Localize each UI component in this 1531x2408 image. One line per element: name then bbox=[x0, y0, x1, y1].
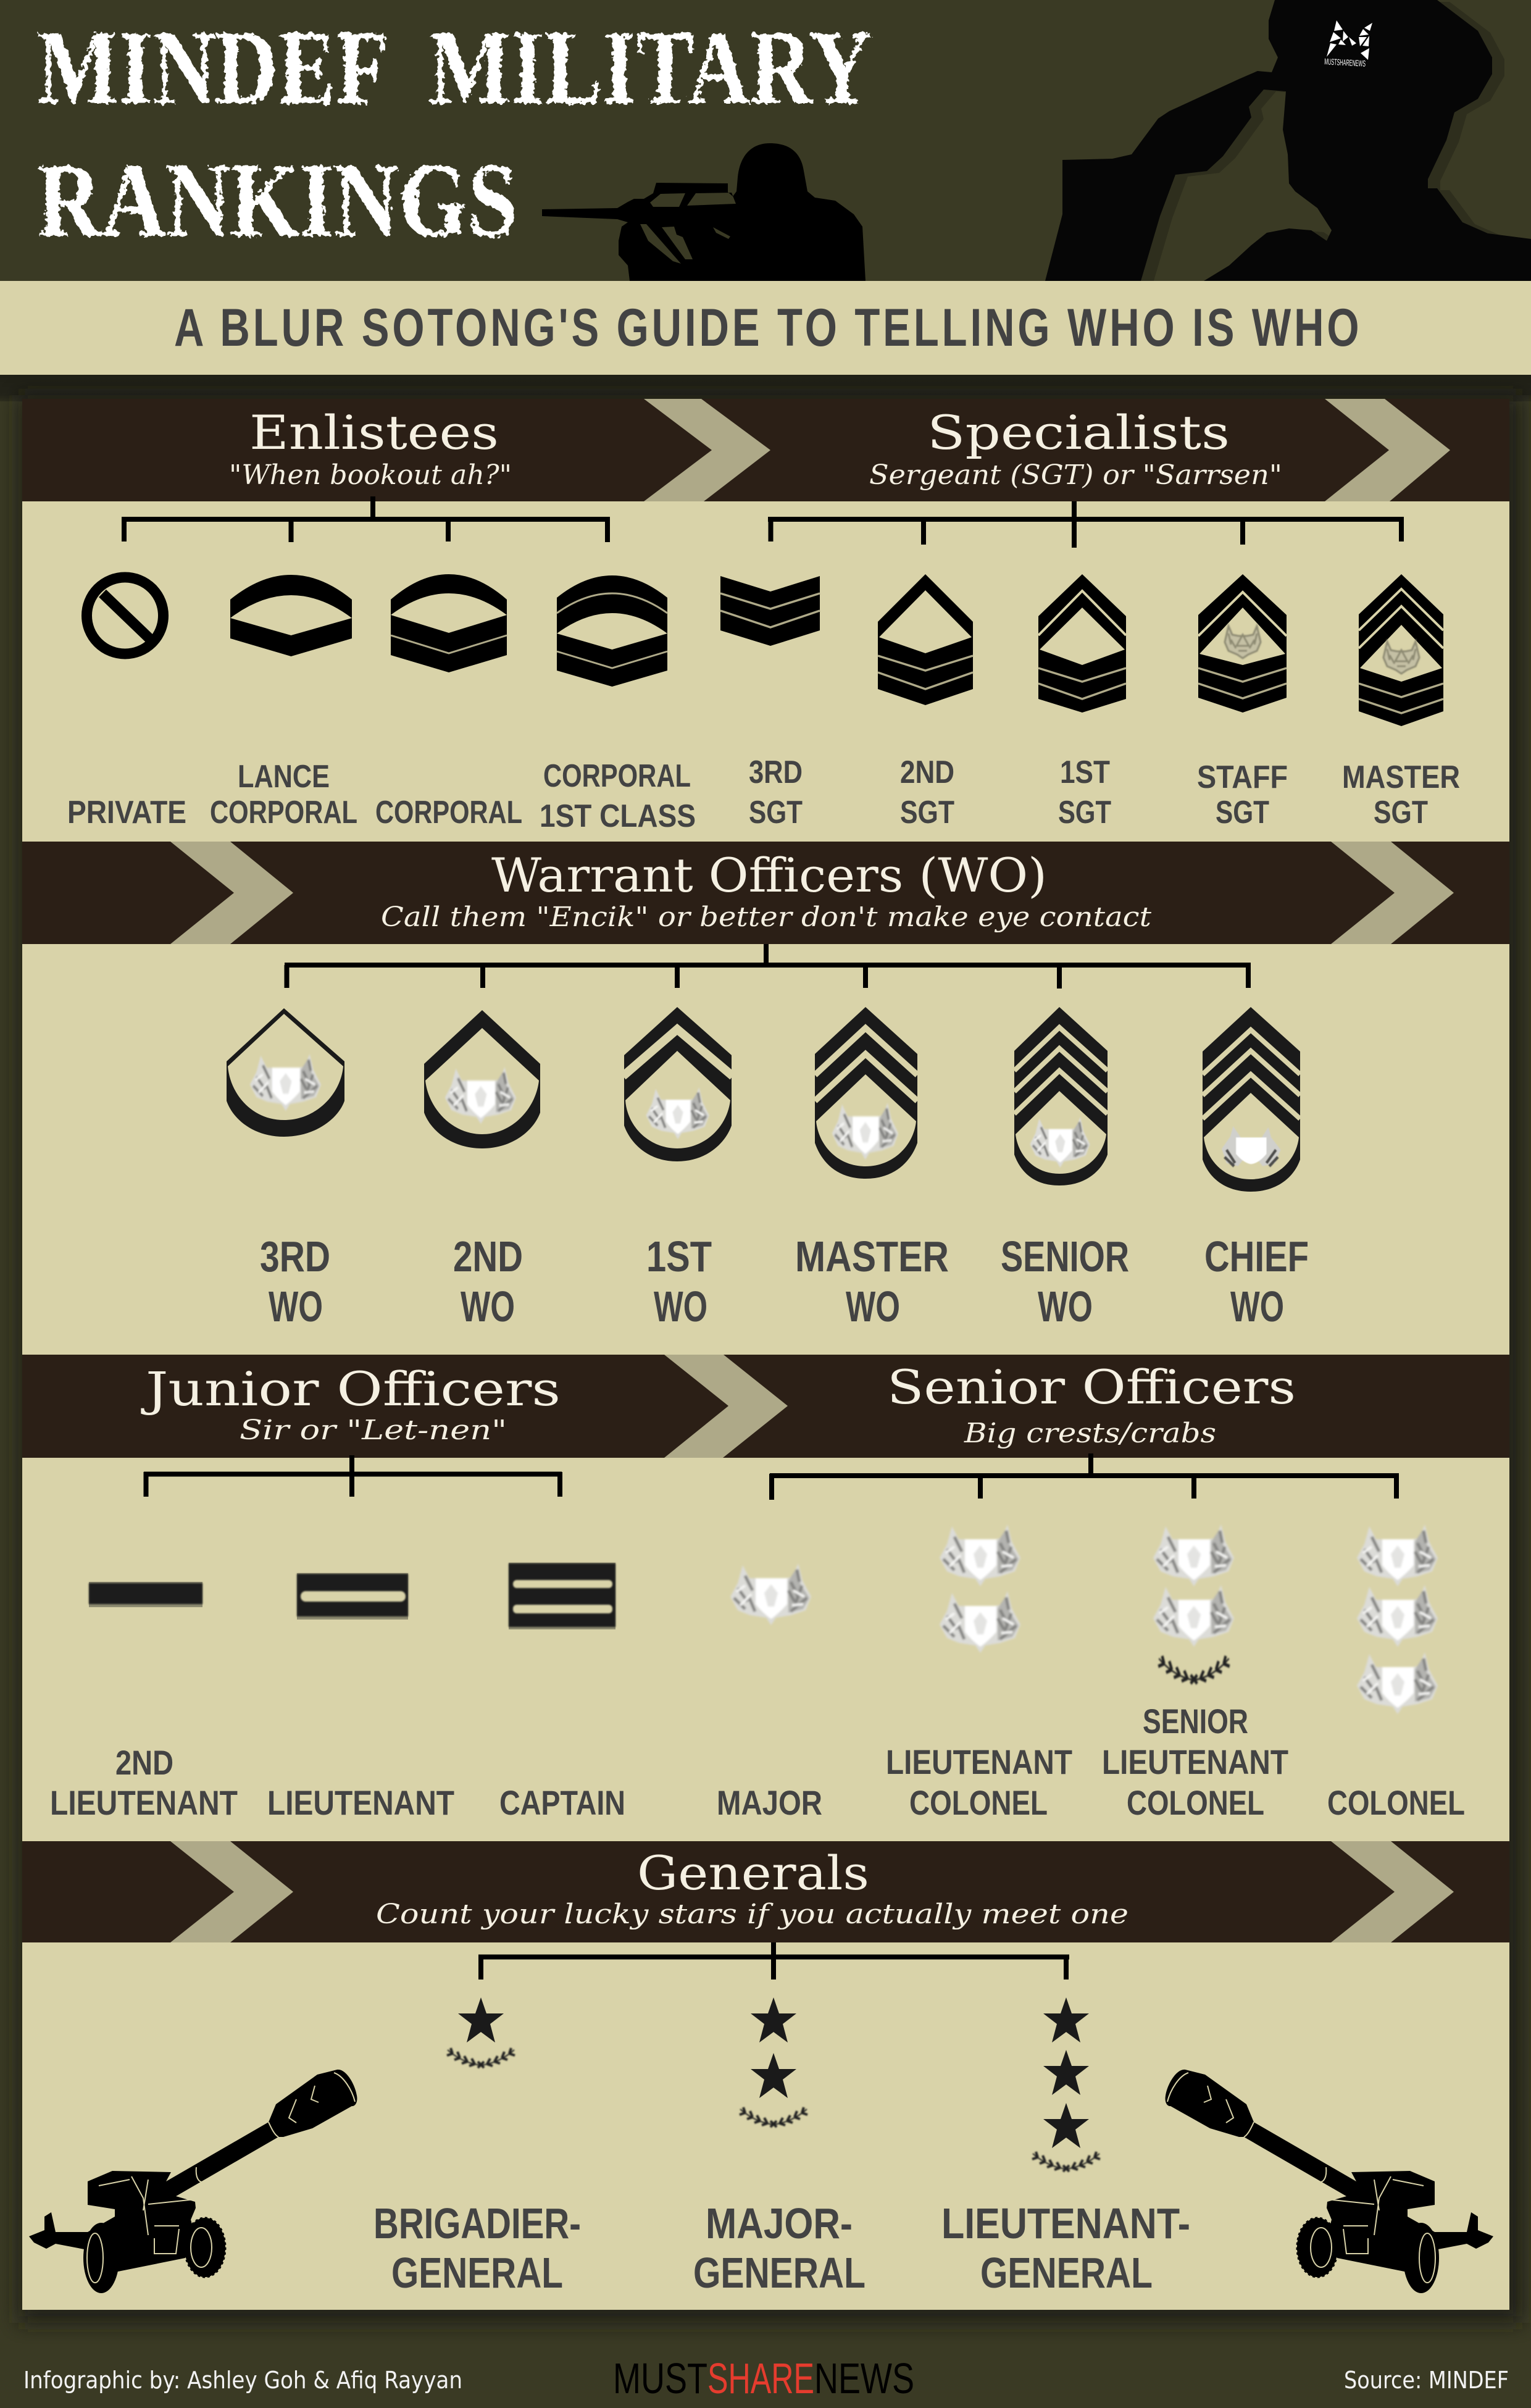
logo: Must Share News: MUST bbox=[613, 2354, 707, 2402]
label: brigadier-general: BRIGADIER- bbox=[373, 2199, 581, 2247]
icon: second lieutenant bar bbox=[89, 1582, 202, 1607]
icon: lieutenant bars bbox=[297, 1573, 408, 1620]
label: staff sgt: STAFF bbox=[1197, 759, 1288, 795]
logo on cap: MUSTSHARENEWS bbox=[1324, 56, 1366, 69]
banner: Junior and Senior Officers: Big crests/crabs bbox=[964, 1418, 1216, 1449]
label: 1st wo: 1ST bbox=[646, 1232, 712, 1281]
label: senior wo: SENIOR bbox=[1001, 1232, 1129, 1281]
label: 2nd sgt: 2ND bbox=[900, 755, 954, 790]
panel: Enlistees ranks bbox=[67, 496, 696, 834]
icon: senior lieutenant colonel crests and laurel bbox=[1153, 1524, 1234, 1684]
icon: brigadier-general star and laurel bbox=[447, 1997, 515, 2068]
label: brigadier-general bbox=[373, 2199, 581, 2297]
banner: Enlistees and Specialists: "When bookout ah?" bbox=[229, 459, 512, 491]
icon: lance corporal chevron bbox=[230, 575, 352, 656]
label: senior wo: WO bbox=[1038, 1282, 1093, 1331]
banner: Enlistees and Specialists: Specialists bbox=[927, 405, 1230, 460]
icon: sniper silhouette bbox=[542, 143, 866, 281]
icon: left howitzer bbox=[29, 2070, 357, 2293]
connector bracket: generals bbox=[478, 1942, 1069, 1979]
icon: right howitzer bbox=[1166, 2070, 1493, 2293]
connector bracket: senior officers bbox=[770, 1453, 1399, 1500]
icon: 2nd warrant officer bbox=[424, 1010, 540, 1148]
icon: corporal chevrons bbox=[391, 574, 507, 672]
icon: saluting soldier silhouette bbox=[1045, 0, 1531, 283]
banner: Warrant Officers: Call them "Encik" or better don't make eye contact bbox=[381, 901, 1151, 933]
label: lieutenant colonel: LIEUTENANT bbox=[886, 1742, 1072, 1781]
label: master sgt: SGT bbox=[1374, 795, 1428, 830]
icon: lieutenant-general stars and laurel bbox=[1032, 1997, 1100, 2172]
connector bracket: enlistees bbox=[122, 496, 609, 542]
banner: Junior and Senior Officers: Sir or "Let-nen" bbox=[240, 1415, 507, 1446]
banner: Junior and Senior Officers bbox=[22, 1355, 1509, 1458]
icon: senior warrant officer bbox=[1014, 1007, 1108, 1185]
icon: lieutenant colonel crests bbox=[940, 1524, 1020, 1653]
banner: Generals: Count your lucky stars if you actually meet one bbox=[376, 1899, 1128, 1930]
connector bracket: specialists bbox=[768, 501, 1403, 548]
icon: 2nd sergeant bbox=[878, 574, 973, 705]
label: lance corporal bbox=[210, 759, 357, 830]
logo: Must Share News: SHARE bbox=[707, 2354, 814, 2402]
main panel shadow bbox=[19, 395, 1522, 2323]
label: corporal 1st class: CORPORAL bbox=[543, 758, 691, 794]
label: corporal 1st class bbox=[540, 758, 696, 834]
icon: private, no insignia bbox=[86, 577, 163, 654]
logo: Must Share News bbox=[613, 2354, 914, 2402]
label: lieutenant-general bbox=[941, 2199, 1190, 2297]
subtitle band bbox=[0, 281, 1531, 375]
label: senior lieutenant colonel: SENIOR bbox=[1143, 1702, 1248, 1741]
label: 3rd sgt: 3RD bbox=[749, 755, 803, 790]
panel: Specialists ranks bbox=[720, 501, 1460, 830]
banner: Warrant Officers: Warrant Officers (WO) bbox=[491, 848, 1047, 903]
label: 3rd wo: 3RD bbox=[260, 1232, 330, 1281]
connector bracket: junior officers bbox=[144, 1455, 562, 1497]
label: 1st sgt: SGT bbox=[1058, 795, 1111, 830]
header section bbox=[37, 0, 1531, 283]
icon: master warrant officer bbox=[815, 1007, 917, 1179]
icon: major-general stars and laurel bbox=[740, 1997, 807, 2127]
label: 1st sgt: 1ST bbox=[1060, 755, 1110, 790]
label: 3rd sgt: SGT bbox=[749, 795, 803, 830]
label: major-general: GENERAL bbox=[693, 2249, 866, 2297]
panel: Junior Officer ranks bbox=[50, 1455, 625, 1822]
label: major: MAJOR bbox=[717, 1783, 822, 1822]
label: 1st wo: WO bbox=[654, 1282, 707, 1331]
label: corporal: CORPORAL bbox=[375, 795, 522, 830]
label: colonel: COLONEL bbox=[1327, 1783, 1465, 1822]
panel: Warrant Officer ranks bbox=[227, 944, 1309, 1331]
banner: Generals: Generals bbox=[637, 1846, 869, 1900]
label: 2nd sgt: SGT bbox=[900, 795, 954, 830]
banner: Generals bbox=[22, 1841, 1509, 1942]
banner: Enlistees and Specialists: Sergeant (SGT) or "Sarrsen" bbox=[869, 459, 1282, 491]
icon: colonel crests bbox=[1357, 1524, 1438, 1714]
label: lieutenant colonel bbox=[886, 1742, 1072, 1822]
title: MINDEF MILITARY RANKINGS: RANKINGS bbox=[37, 142, 517, 259]
subtitle band shadow bbox=[0, 370, 1531, 401]
label: lieutenant-general: LIEUTENANT- bbox=[941, 2199, 1190, 2247]
label: 3rd wo: WO bbox=[269, 1282, 323, 1331]
label: captain: CAPTAIN bbox=[499, 1783, 625, 1822]
icon: staff sergeant bbox=[1198, 574, 1287, 713]
label: lieutenant: LIEUTENANT bbox=[267, 1783, 454, 1822]
credit text: Infographic by: Ashley Goh & Afiq Rayyan bbox=[23, 2367, 462, 2394]
icon: captain bars bbox=[509, 1563, 615, 1629]
icon: 3rd warrant officer bbox=[227, 1008, 344, 1137]
label: chief wo bbox=[1204, 1232, 1309, 1331]
title: MINDEF MILITARY RANKINGS: MINDEF MILITARY bbox=[37, 9, 872, 127]
label: 2nd lieutenant bbox=[50, 1743, 238, 1822]
banner: Enlistees and Specialists bbox=[22, 399, 1509, 501]
label: 2nd lieutenant: 2ND bbox=[115, 1743, 173, 1782]
label: staff sgt: SGT bbox=[1216, 795, 1269, 830]
label: master wo: MASTER bbox=[795, 1232, 949, 1281]
label: 3rd wo bbox=[260, 1232, 330, 1331]
label: senior lieutenant colonel: COLONEL bbox=[1127, 1783, 1264, 1822]
logo on cap bbox=[1324, 20, 1372, 69]
source text: Source: MINDEF bbox=[1344, 2367, 1509, 2394]
label: staff sgt bbox=[1197, 759, 1288, 830]
label: lieutenant colonel: COLONEL bbox=[909, 1783, 1048, 1822]
label: senior lieutenant colonel bbox=[1102, 1702, 1288, 1822]
label: 1st sgt bbox=[1058, 755, 1111, 830]
panel: General ranks bbox=[29, 1942, 1493, 2297]
label: 2nd wo: 2ND bbox=[453, 1232, 523, 1281]
label: senior wo bbox=[1001, 1232, 1129, 1331]
label: lance corporal: CORPORAL bbox=[210, 795, 357, 830]
main cream panel bbox=[22, 399, 1509, 2310]
label: 2nd wo: WO bbox=[461, 1282, 515, 1331]
banner: Enlistees and Specialists: Enlistees bbox=[249, 405, 499, 460]
connector bracket: warrant officers bbox=[285, 944, 1251, 989]
banner: Warrant Officers bbox=[22, 842, 1509, 944]
footer bbox=[23, 2354, 1509, 2402]
panel: Senior Officer ranks bbox=[717, 1453, 1465, 1822]
icon: master sergeant bbox=[1359, 574, 1443, 726]
banner: Junior and Senior Officers: Senior Officers bbox=[887, 1360, 1296, 1415]
icon: chief warrant officer bbox=[1203, 1007, 1300, 1192]
label: lieutenant-general: GENERAL bbox=[980, 2249, 1153, 2297]
label: 2nd lieutenant: LIEUTENANT bbox=[50, 1783, 238, 1822]
label: brigadier-general: GENERAL bbox=[391, 2249, 563, 2297]
label: master wo: WO bbox=[846, 1282, 900, 1331]
icon: 1st sergeant bbox=[1038, 574, 1126, 713]
icon: major crest bbox=[730, 1563, 811, 1625]
label: master wo bbox=[795, 1232, 949, 1331]
title: MINDEF MILITARY RANKINGS bbox=[37, 9, 872, 259]
icon: corporal first class chevrons bbox=[557, 575, 667, 687]
label: corporal 1st class: 1ST CLASS bbox=[540, 798, 696, 834]
icon: 3rd sergeant bbox=[720, 576, 820, 646]
label: major-general bbox=[693, 2199, 866, 2297]
label: 1st wo bbox=[646, 1232, 712, 1331]
label: 3rd sgt bbox=[749, 755, 803, 830]
label: 2nd wo bbox=[453, 1232, 523, 1331]
label: master sgt bbox=[1342, 759, 1460, 830]
icon: 1st warrant officer bbox=[623, 1007, 733, 1161]
label: lance corporal: LANCE bbox=[238, 759, 330, 795]
label: chief wo: WO bbox=[1230, 1282, 1284, 1331]
banner: Junior and Senior Officers: Junior Officers bbox=[141, 1361, 561, 1416]
logo: Must Share News: NEWS bbox=[814, 2354, 914, 2402]
label: private: PRIVATE bbox=[67, 795, 186, 830]
label: 2nd sgt bbox=[900, 755, 954, 830]
label: major-general: MAJOR- bbox=[706, 2199, 853, 2247]
subtitle band: A BLUR SOTONG'S GUIDE TO TELLING WHO IS WHO bbox=[174, 298, 1359, 357]
label: master sgt: MASTER bbox=[1342, 759, 1460, 795]
label: chief wo: CHIEF bbox=[1204, 1232, 1309, 1281]
label: senior lieutenant colonel: LIEUTENANT bbox=[1102, 1742, 1288, 1781]
